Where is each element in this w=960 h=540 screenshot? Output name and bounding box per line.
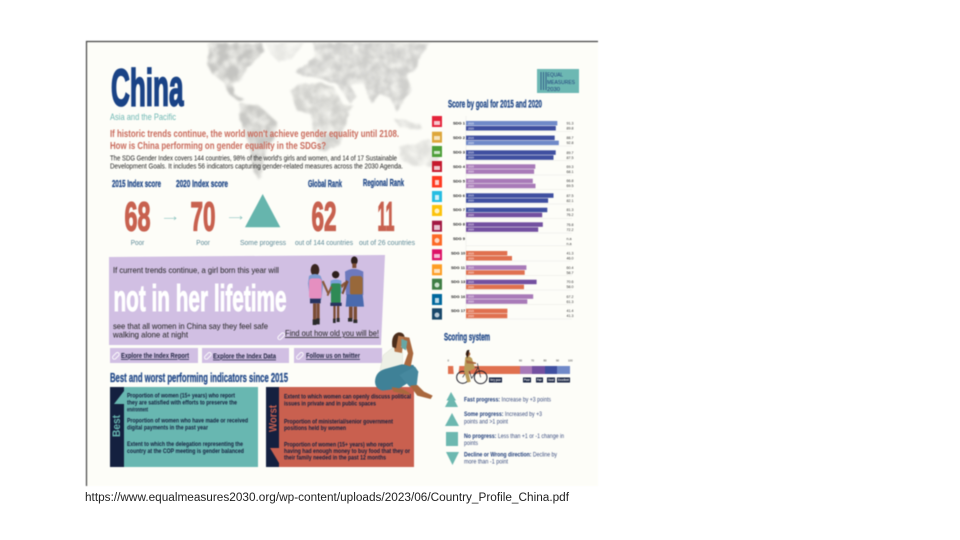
some progress text <box>464 411 542 426</box>
SDG 11 row <box>432 264 574 275</box>
panel closing text: see that all women in China say they feel safe <box>113 321 268 331</box>
scoring scale bar: Very poor <box>490 378 502 382</box>
SDG 11 row: SDG 11 <box>451 265 466 270</box>
panel: best indicators: environment <box>127 407 148 414</box>
illustration: girl on bicycle <box>453 347 487 384</box>
SDG 4 row: SDG 4 <box>453 164 466 169</box>
scoring scale bar: Fair <box>537 378 543 382</box>
SDG 10 row: 46.0 <box>566 256 574 260</box>
infographic page: 11 <box>378 194 394 240</box>
stat captions: out of 26 countries <box>359 238 415 247</box>
no progress text <box>464 433 564 447</box>
icon: fast progress <box>445 392 458 407</box>
icon: no progress <box>446 432 458 446</box>
source url: https://www.equalmeasures2030.org/wp-content/uploads/2023/06/Country_Profile_China.pdf <box>85 492 570 504</box>
SDG 3 row: 2020 <box>468 156 474 160</box>
SDG 5 row: 2015 <box>468 179 474 183</box>
link buttons: Explore the Index Report <box>121 351 189 360</box>
illustration: three schoolgirls <box>308 256 364 325</box>
panel: best indicators: Extent to which the delegation representing the <box>127 441 243 448</box>
SDG 1 row <box>432 116 574 130</box>
SDG 6 row: SDG 6 <box>453 193 466 198</box>
SDG 10 row: 41.3 <box>566 252 574 256</box>
stat numbers: 68 <box>124 194 150 240</box>
SDG 4 row: 69.3 <box>566 165 574 169</box>
panel: worst indicators: issues in private and in public spaces <box>284 401 376 408</box>
SDG 6 row: 82.1 <box>566 199 574 203</box>
SDG 3 row: 87.5 <box>566 156 574 160</box>
scoring scale bar: 80 <box>544 358 547 362</box>
scoring system heading: Scoring system <box>444 332 490 344</box>
SDG 1 row: 2015 <box>468 121 474 125</box>
SDG 17 row: 41.4 <box>566 309 574 313</box>
SDG 13 row: 70.6 <box>566 280 574 284</box>
SDG 2 row: 88.7 <box>566 136 574 140</box>
SDG 3 row: 89.7 <box>566 151 574 155</box>
SDG 16 row <box>432 294 574 305</box>
SDG 8 row: 2015 <box>468 223 474 227</box>
SDG 6 row: 2020 <box>468 199 474 203</box>
SDG 2 row: 2015 <box>468 136 474 140</box>
stat captions <box>131 238 415 247</box>
panel: best indicators: Proportion of women (15+ years) who report <box>127 392 236 400</box>
link text: Find out how old you will be! <box>285 328 379 338</box>
red headline: If historic trends continue, the world won't achieve gender equality until 2108. <box>110 128 399 140</box>
SDG 7 row: 2020 <box>468 213 474 217</box>
icon: decline <box>446 452 459 465</box>
SDG 13 row <box>432 279 574 290</box>
stat numbers <box>124 194 394 240</box>
scoring scale bar: Good <box>548 378 554 382</box>
icon: some progress <box>445 413 459 426</box>
scoring scale bar: 90 <box>556 358 560 362</box>
panel: worst indicators: Extent to which women can openly discuss political <box>284 394 411 401</box>
scoring scale bar: Excellent <box>558 378 570 382</box>
SDG 13 row: 2015 <box>468 280 474 284</box>
scoring scale bar: 0 <box>448 358 450 362</box>
icon: some progress triangle <box>245 194 280 227</box>
link buttons: Explore the Index Data <box>213 352 277 360</box>
SDG 10 row: 2020 <box>468 256 474 260</box>
SDG 7 row: 81.3 <box>566 208 574 212</box>
SDG 4 row <box>432 161 574 174</box>
red headline: How is China performing on gender equality in the SDGs? <box>110 140 326 152</box>
SDG 5 row <box>432 176 574 188</box>
link buttons <box>110 348 382 363</box>
stat captions: Poor <box>196 238 210 247</box>
SDG 9 row: n.a <box>566 242 572 246</box>
stat headings: 2020 Index score <box>176 178 228 190</box>
SDG 8 row: 76.8 <box>566 223 574 227</box>
fast progress text: Fast progress: Increase by +3 points <box>464 397 552 404</box>
SDG 2 row: SDG 2 <box>453 135 466 140</box>
intro text: Development Goals. It includes 56 indicators capturing gender-related measures across the 2030 Agenda. <box>110 162 403 170</box>
SDG 4 row: 68.1 <box>566 170 574 174</box>
panel: best indicators: Proportion of women who have made or received <box>127 418 248 425</box>
SDG 11 row: 2015 <box>468 266 474 270</box>
SDG 6 row: 2015 <box>468 194 474 198</box>
SDG 10 row: 2015 <box>468 251 474 255</box>
SDG 3 row: SDG 3 <box>453 150 466 154</box>
title: China <box>111 60 184 118</box>
SDG 3 row: 2015 <box>468 151 474 155</box>
panel: worst indicators: having had enough money to buy food that they or <box>284 448 410 455</box>
panel: worst indicators: their family needed in the past 12 months <box>284 455 386 462</box>
panel: not in her lifetime <box>109 255 385 345</box>
SDG 4 row: 2015 <box>468 165 474 169</box>
page frame edges <box>86 42 598 486</box>
logo: EQUAL <box>547 73 563 79</box>
SDG 6 row: 87.5 <box>566 194 574 198</box>
SDG 4 row: 2020 <box>468 170 474 174</box>
no progress text: points <box>464 440 479 447</box>
decline text: more than -1 point <box>464 459 508 466</box>
SDG 13 row: SDG 13 <box>451 279 466 284</box>
SDG 3 row <box>432 146 574 160</box>
scoring scale bar <box>448 358 573 382</box>
SDG 9 row: n.a <box>566 237 572 241</box>
panel closing text <box>112 321 268 340</box>
SDG 16 row: 2020 <box>468 300 474 304</box>
stat captions: Some progress <box>240 238 286 247</box>
panel closing text: walking alone at night <box>112 330 189 340</box>
SDG 7 row: 76.2 <box>566 213 574 217</box>
decline text: Decline or Wrong direction: Decline by <box>464 452 558 459</box>
SDG 2 row: 2020 <box>468 141 474 145</box>
SDG 1 row: SDG 1 <box>453 120 466 126</box>
infographic page <box>86 42 598 486</box>
world map background <box>207 43 440 180</box>
SDG 9 row <box>432 234 572 246</box>
scoring scale bar: 70 <box>531 358 535 362</box>
decline text <box>464 452 558 466</box>
SDG 13 row: 58.0 <box>566 285 574 289</box>
SDG 10 row: SDG 10 <box>451 250 466 256</box>
panel: worst indicators <box>266 387 414 467</box>
illustration: seated woman <box>375 332 433 399</box>
SDG 1 row: 2020 <box>468 126 474 130</box>
SDG 13 row: 2020 <box>468 285 474 289</box>
panel: best indicators: digital payments in the past year <box>127 424 208 431</box>
link buttons: Follow us on twitter <box>306 351 360 360</box>
intro text <box>110 154 403 170</box>
SDG 2 row: 92.8 <box>566 141 574 145</box>
SDG 8 row: 72.2 <box>566 228 574 232</box>
logo <box>537 69 579 93</box>
SDG 2 row <box>432 132 574 145</box>
scoring scale bar: 60 <box>519 358 523 362</box>
stat numbers: 62 <box>312 194 336 240</box>
panel: best indicators: Best <box>111 415 123 437</box>
SDG 5 row: 2020 <box>468 184 474 188</box>
SDG 16 row: 67.2 <box>566 295 574 299</box>
logo: MEASURES <box>547 80 575 86</box>
region subtitle: Asia and the Pacific <box>110 112 176 123</box>
logo: 2030 <box>547 87 560 93</box>
page background <box>87 42 598 486</box>
SDG 6 row <box>432 191 574 203</box>
panel: worst indicators: Proportion of women (15+ years) who report <box>284 441 394 448</box>
SDG 8 row: SDG 8 <box>453 222 466 226</box>
some progress text: points and >1 point <box>464 419 508 426</box>
stat headings <box>112 177 404 190</box>
stat headings: 2015 Index score <box>112 178 161 190</box>
panel: worst indicators: positions held by women <box>284 425 346 432</box>
SDG 7 row: 2015 <box>468 208 474 212</box>
icon: link <box>277 332 285 340</box>
SDG 8 row <box>432 221 574 232</box>
panel: best indicators: they are satisfied with efforts to preserve the <box>127 400 237 407</box>
SDG 1 row: 91.3 <box>566 122 574 126</box>
SDG 17 row <box>432 308 574 320</box>
SDG 11 row: 60.4 <box>566 266 574 270</box>
SDG 16 row: SDG 16 <box>451 294 466 299</box>
stat numbers: 70 <box>190 194 216 240</box>
panel: worst indicators: Worst <box>268 405 280 432</box>
SDG 5 row: 66.8 <box>566 179 574 183</box>
stat captions: out of 144 countries <box>295 238 353 247</box>
stat headings: Regional Rank <box>363 177 404 189</box>
no progress text: No progress: Less than +1 or -1 change in <box>464 433 564 440</box>
intro text: The SDG Gender Index covers 144 countries, 98% of the world's girls and women, and 14 of 17 Sustainable <box>110 154 397 162</box>
SDG 17 row: SDG 17 <box>451 308 466 313</box>
SDG 16 row: 2015 <box>468 295 474 299</box>
some progress text: Some progress: Increased by +3 <box>464 411 542 418</box>
stat captions: Poor <box>131 238 145 247</box>
SDG 1 row: 89.8 <box>566 126 574 130</box>
arrows between scores <box>164 216 242 220</box>
SDG 5 row: 69.5 <box>566 184 574 188</box>
red headline <box>110 128 399 152</box>
panel: best indicators: country at the COP meeting is gender balanced <box>127 448 244 455</box>
SDG 16 row: 61.3 <box>566 300 574 304</box>
SDG 17 row: 2020 <box>468 314 474 318</box>
SDG 7 row <box>432 205 574 217</box>
legend: progress key <box>445 392 564 466</box>
score chart heading: Score by goal for 2015 and 2020 <box>448 99 542 111</box>
SDG 9 row: SDG 9 <box>453 236 466 241</box>
SDG 10 row <box>432 249 574 260</box>
SDG 5 row: SDG 5 <box>453 178 466 184</box>
panel intro text: If current trends continue, a girl born this year will <box>113 265 279 275</box>
big statement: not in her lifetime <box>114 278 286 319</box>
SDG 17 row: 2015 <box>468 309 474 313</box>
scoring scale bar: 100 <box>568 358 573 362</box>
SDG 11 row: 58.7 <box>566 271 574 275</box>
SDG 8 row: 2020 <box>468 228 474 232</box>
SDG 17 row: 41.3 <box>566 314 574 318</box>
stat headings: Global Rank <box>308 178 342 190</box>
scoring scale bar: Poor <box>524 378 531 382</box>
bar chart: score by goal <box>432 116 574 320</box>
panel: worst indicators: Proportion of ministerial/senior government <box>284 418 394 425</box>
best and worst heading: Best and worst performing indicators since 2015 <box>110 370 288 385</box>
panel: best indicators <box>110 387 258 467</box>
SDG 11 row: 2020 <box>468 271 474 275</box>
SDG 7 row: SDG 7 <box>453 207 466 212</box>
